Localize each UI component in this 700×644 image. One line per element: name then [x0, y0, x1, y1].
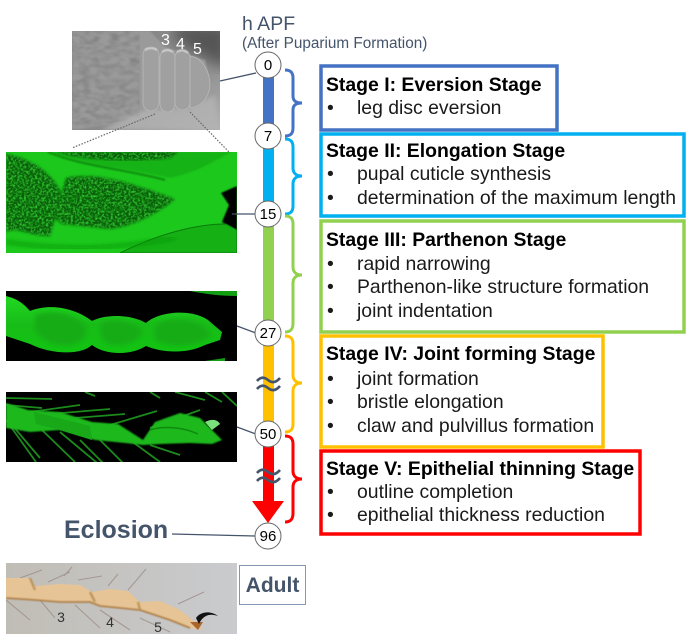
photo: DIC leg disc at 0 h: 3: [161, 32, 170, 49]
time point numbers: 15: [260, 206, 276, 223]
time point numbers: 50: [260, 426, 276, 443]
adult leg photo: 5: [154, 619, 162, 635]
stage 4 box: •: [327, 368, 334, 390]
stage 4 box: bristle elongation: [357, 391, 504, 413]
stage 5 box: •: [327, 481, 334, 503]
zoom guide lines from photo to confocal image: [72, 112, 229, 152]
time point numbers: 7: [264, 128, 272, 145]
stage 2 box: •: [327, 163, 334, 185]
stage 5 box: [321, 451, 640, 534]
confocal image: 27 h pupal leg: [6, 291, 237, 361]
stage 2 box: determination of the maximum length: [357, 187, 676, 209]
connector lines: [172, 73, 256, 536]
stage 4 box: [321, 336, 603, 447]
stage 4 box: joint formation: [356, 368, 479, 390]
stage 2 box: •: [327, 187, 334, 209]
stage 4 box: •: [327, 391, 334, 413]
adult leg photo: [6, 563, 237, 635]
stage 4 box: •: [327, 415, 334, 437]
time point numbers: [260, 57, 276, 545]
photo: DIC leg disc at 0 h: 5: [193, 41, 202, 58]
stage 3 box: •: [327, 276, 334, 298]
photo: DIC leg disc at 0 h: 4: [176, 36, 185, 53]
stage 1 box: Stage I: Eversion Stage: [326, 74, 542, 96]
time point numbers: 96: [260, 528, 276, 545]
stage 2 box: pupal cuticle synthesis: [357, 163, 551, 185]
stage 5 box: outline completion: [357, 481, 513, 503]
stage 1 box: [321, 66, 557, 130]
stage 5 box: Stage V: Epithelial thinning Stage: [326, 458, 634, 480]
stage 2 box: Stage II: Elongation Stage: [326, 140, 565, 162]
stage 5 box: epithelial thickness reduction: [357, 504, 605, 526]
adult leg photo: 3: [57, 609, 65, 625]
time point numbers: 27: [260, 325, 276, 342]
stage 3 box: Stage III: Parthenon Stage: [326, 229, 566, 251]
stage 3 box: [321, 221, 684, 332]
break marks: [257, 378, 280, 482]
confocal image: 15 h pupal leg: [6, 152, 237, 253]
label: Adult: [240, 566, 306, 604]
stage 5 box: •: [327, 504, 334, 526]
photo: DIC leg disc at 0 h: [72, 31, 220, 130]
stage 3 box: rapid narrowing: [357, 253, 491, 275]
stage 1 box: •: [327, 97, 334, 119]
stage 3 box: •: [327, 253, 334, 275]
stage 2 box: [321, 134, 684, 216]
stage 4 box: claw and pulvillus formation: [357, 415, 594, 437]
time point numbers: 0: [264, 57, 272, 74]
stage 1 box: leg disc eversion: [357, 97, 501, 119]
label: Adult: Adult: [246, 574, 299, 597]
timeline bar: [252, 75, 284, 523]
time point circles: [255, 52, 281, 549]
stage 4 box: Stage IV: Joint forming Stage: [326, 343, 596, 365]
stage braces: [285, 70, 302, 522]
stage 3 box: joint indentation: [356, 300, 493, 322]
heading: h APF: h APF: [242, 13, 295, 35]
adult leg photo: 4: [106, 614, 114, 630]
confocal image: 50 h pupal leg with bristles: [6, 392, 237, 462]
label: Eclosion: Eclosion: [64, 516, 168, 544]
heading: h APF: (After Puparium Formation): [242, 35, 427, 52]
stage 3 box: •: [327, 300, 334, 322]
heading: h APF: [242, 13, 427, 52]
stage 3 box: Parthenon-like structure formation: [357, 276, 649, 298]
